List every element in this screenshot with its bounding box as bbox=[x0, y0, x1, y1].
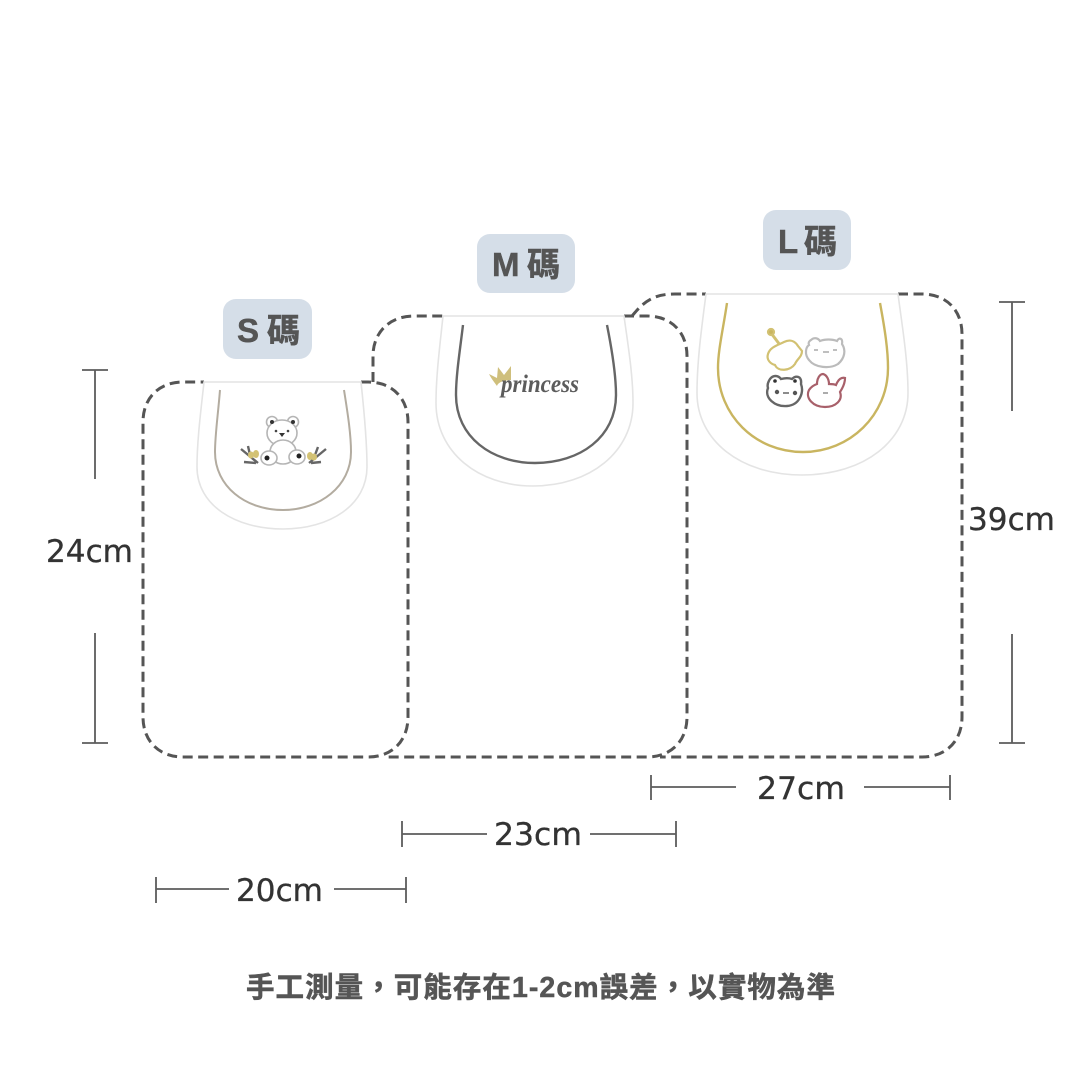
icon: teddy bear bbox=[261, 416, 305, 465]
icon: rabbit face bbox=[808, 374, 845, 407]
dashed outline: S size bbox=[143, 382, 408, 757]
icon: yellow animal face bbox=[768, 329, 802, 370]
bib: S size bbox=[197, 382, 367, 529]
size badge: S: S bbox=[237, 312, 259, 349]
dimension: L height 39cm bbox=[968, 302, 1055, 743]
dashed outline: L size bbox=[632, 294, 962, 757]
dimension: L width 27cm: 27cm bbox=[757, 771, 845, 807]
size badge: S: 碼 bbox=[267, 312, 300, 349]
bib: M size bbox=[436, 316, 633, 486]
dashed outline: M size bbox=[373, 316, 687, 757]
dimension: S width 20cm: 20cm bbox=[236, 873, 323, 909]
size badge: L: L bbox=[778, 223, 798, 260]
icon: left sprig bbox=[241, 446, 259, 463]
dimension: S width 20cm bbox=[156, 873, 406, 909]
size badge: M bbox=[477, 234, 575, 293]
dimension: S height 24cm: 24cm bbox=[46, 534, 133, 570]
size badge: S bbox=[223, 299, 312, 359]
icon: crown bbox=[489, 366, 511, 386]
size badge: M: M bbox=[492, 246, 520, 283]
icon: right sprig bbox=[307, 447, 326, 463]
size badge: L: 碼 bbox=[804, 223, 837, 260]
dimension: S height 24cm bbox=[46, 370, 133, 743]
dimension: L width 27cm bbox=[651, 771, 950, 807]
dimension: M width 23cm bbox=[402, 817, 676, 853]
icon: white bear face bbox=[806, 338, 844, 367]
bib: L size bbox=[697, 294, 908, 475]
dimension: M width 23cm: 23cm bbox=[494, 817, 582, 853]
size badge: L bbox=[763, 210, 851, 270]
size badge: M: 碼 bbox=[527, 246, 560, 283]
text: princess: princess bbox=[499, 371, 579, 398]
footnote: 手工測量，可能存在1-2cm誤差，以實物為準 bbox=[246, 972, 835, 1004]
dimension: L height 39cm: 39cm bbox=[968, 502, 1055, 538]
icon: frog face bbox=[767, 376, 802, 406]
